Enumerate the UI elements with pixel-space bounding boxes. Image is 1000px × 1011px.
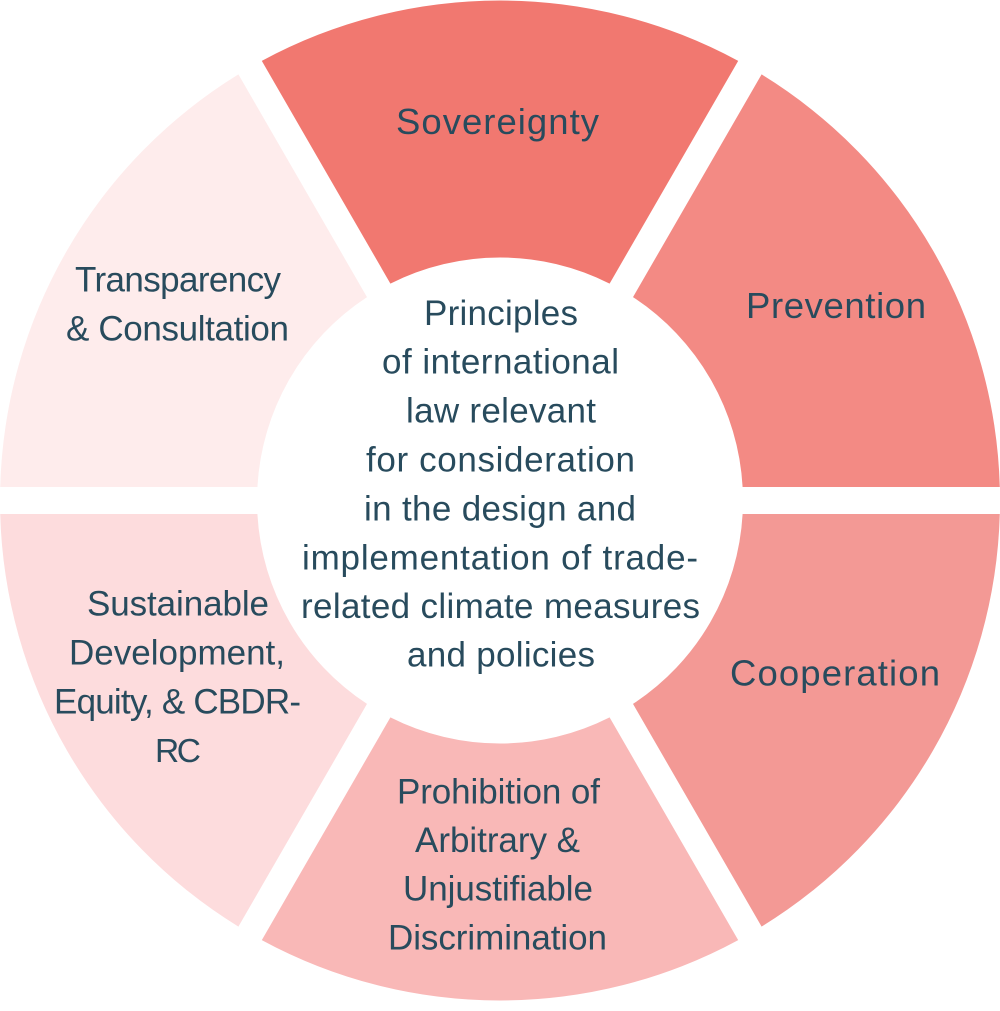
panel: Prohibition of Arbitrary and Unjustifiable Discrimination: Arbitrary &	[415, 821, 580, 860]
central text: and policies	[407, 636, 595, 674]
central text: related climate measures	[301, 587, 700, 626]
central text: implementation of trade-	[302, 538, 698, 578]
panel: Transparency and Consultation: & Consultation	[66, 310, 289, 348]
panel: Transparency and Consultation	[0, 74, 367, 487]
panel: Sovereignty: Sovereignty	[396, 101, 600, 142]
panel: Prohibition of Arbitrary and Unjustifiable Discrimination: Discrimination	[388, 918, 607, 958]
panel: Cooperation	[633, 514, 1000, 927]
central text: in the design and	[364, 490, 636, 528]
panel: Sustainable Development, Equity, and CBDR-RC: Sustainable	[87, 584, 269, 624]
panel: Sustainable Development, Equity, and CBDR-RC: Development,	[69, 634, 285, 672]
panel: Prevention: Prevention	[746, 285, 926, 326]
panel: Cooperation: Cooperation	[730, 652, 940, 694]
panel: Prohibition of Arbitrary and Unjustifiable Discrimination: Unjustifiable	[403, 870, 593, 908]
panel: Sustainable Development, Equity, and CBDR-RC	[0, 514, 367, 927]
panel: Prevention	[633, 74, 1000, 487]
central text: for consideration	[366, 440, 635, 480]
central text: Principles	[424, 294, 578, 333]
panel: Sovereignty	[262, 1, 738, 284]
central text: of international	[382, 342, 619, 382]
panel: Prohibition of Arbitrary and Unjustifiable Discrimination	[262, 717, 738, 1000]
panel: Sustainable Development, Equity, and CBDR-RC: Equity, & CBDR-	[54, 682, 301, 722]
panel: Transparency and Consultation: Transparency	[75, 260, 282, 300]
central text: law relevant	[406, 392, 596, 430]
panel: Sustainable Development, Equity, and CBDR-RC: RC	[155, 733, 201, 770]
panel: Prohibition of Arbitrary and Unjustifiable Discrimination: Prohibition of	[397, 772, 600, 812]
central text	[301, 294, 700, 674]
